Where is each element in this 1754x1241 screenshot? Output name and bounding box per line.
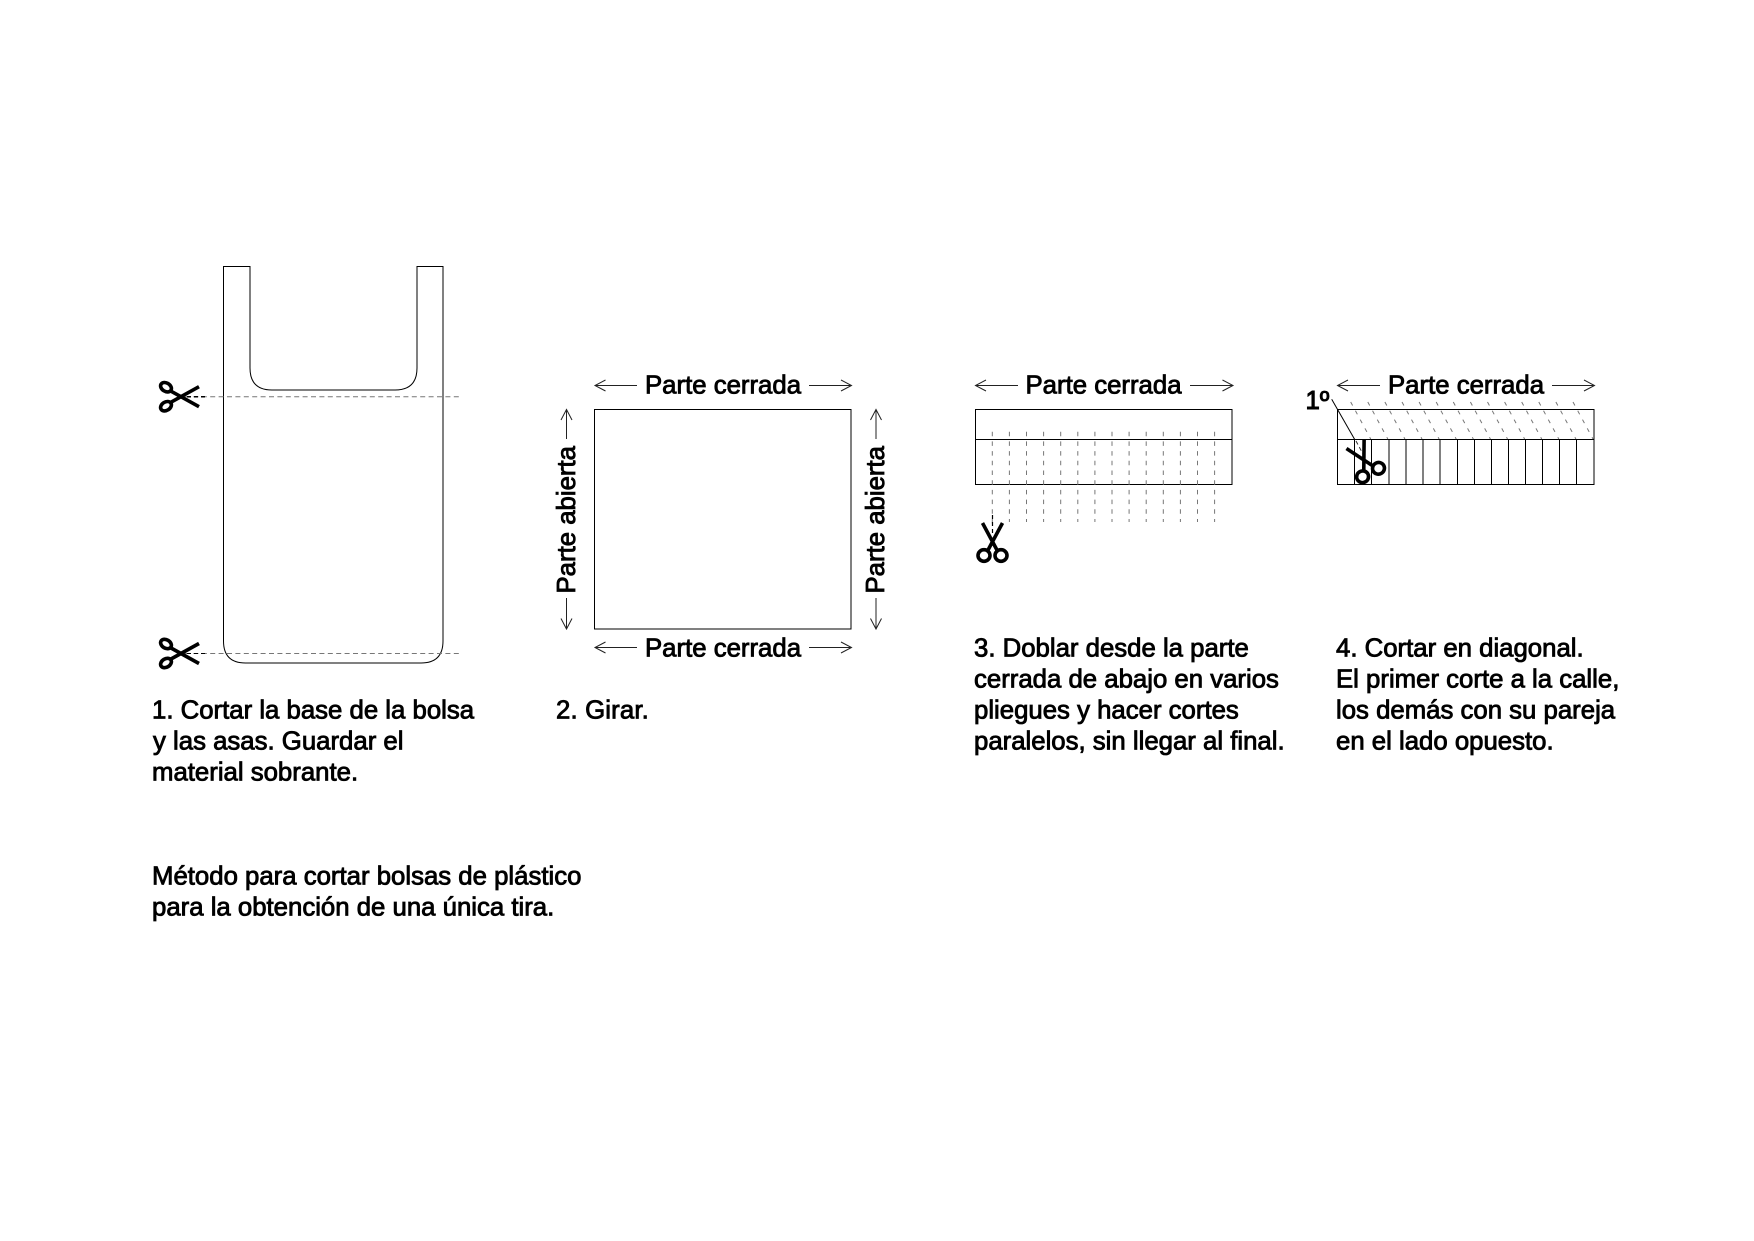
parallel cut lines [992,432,1215,527]
icon: scissors [978,515,1007,561]
label: closed side: Parte cerrada [1026,371,1182,399]
text: step 3 instructions: cerrada de abajo en varios [974,665,1279,693]
label: right open side: Parte abierta [862,445,890,594]
panel: step 1 cut the bag [152,266,481,786]
folded strip with cuts [1338,410,1594,484]
label: left open side: Parte abierta [553,445,581,594]
arrow: bottom right [809,642,852,653]
text: step 1 instructions: material sobrante. [152,758,358,786]
arrow: top left [595,380,637,391]
title: para la obtención de una única tira. [152,894,554,922]
text: step 4 instructions: en el lado opuesto. [1336,727,1554,755]
lower cut line [185,652,462,654]
label: bottom closed side: Parte cerrada [645,634,802,662]
text: step 1 instructions: y las asas. Guardar el [153,727,403,755]
text: step 3 instructions: pliegues y hacer cortes [974,696,1239,724]
arrow: right down [870,598,882,629]
upper cut line [185,396,462,398]
arrow: bottom left [595,642,637,653]
text: step 3 instructions: 3. Doblar desde la parte [974,634,1249,662]
label: first cut: 1º [1306,387,1330,415]
text: step 2 instructions: 2. Girar. [556,696,649,724]
arrow: left [976,380,1018,391]
icon: lower scissors [159,637,207,670]
panel: step 4 diagonal cut [1306,371,1627,755]
text: step 3 instructions: paralelos, sin llegar al final. [974,727,1285,755]
text: step 1 instructions: 1. Cortar la base de la bolsa [152,696,475,724]
text: step 4 instructions: los demás con su pareja [1336,696,1616,724]
arrow: left down [561,598,572,629]
panel: step 3 fold and cut [974,371,1286,755]
arrow: left up [561,410,572,439]
first cut leader line [1332,399,1355,440]
diagonal cut lines [1351,402,1593,439]
first diagonal cut continuation [1356,441,1363,454]
label: closed side: Parte cerrada [1388,371,1545,399]
panel: step 2 rotate [553,371,890,724]
text: step 4 instructions: El primer corte a la calle, [1336,665,1619,693]
text: step 4 instructions: 4. Cortar en diagonal. [1336,634,1584,662]
square sheet [594,410,851,629]
title: Método para cortar bolsas de plástico [152,862,581,890]
arrow: right [1190,380,1233,391]
folded strip [976,410,1232,484]
icon: upper scissors [159,381,207,413]
bag outline [224,266,443,663]
arrow: top right [809,380,852,391]
label: top closed side: Parte cerrada [645,371,802,399]
arrow: left [1338,380,1380,391]
arrow: right up [870,410,882,439]
icon: scissors [1342,437,1387,485]
arrow: right [1552,380,1594,391]
